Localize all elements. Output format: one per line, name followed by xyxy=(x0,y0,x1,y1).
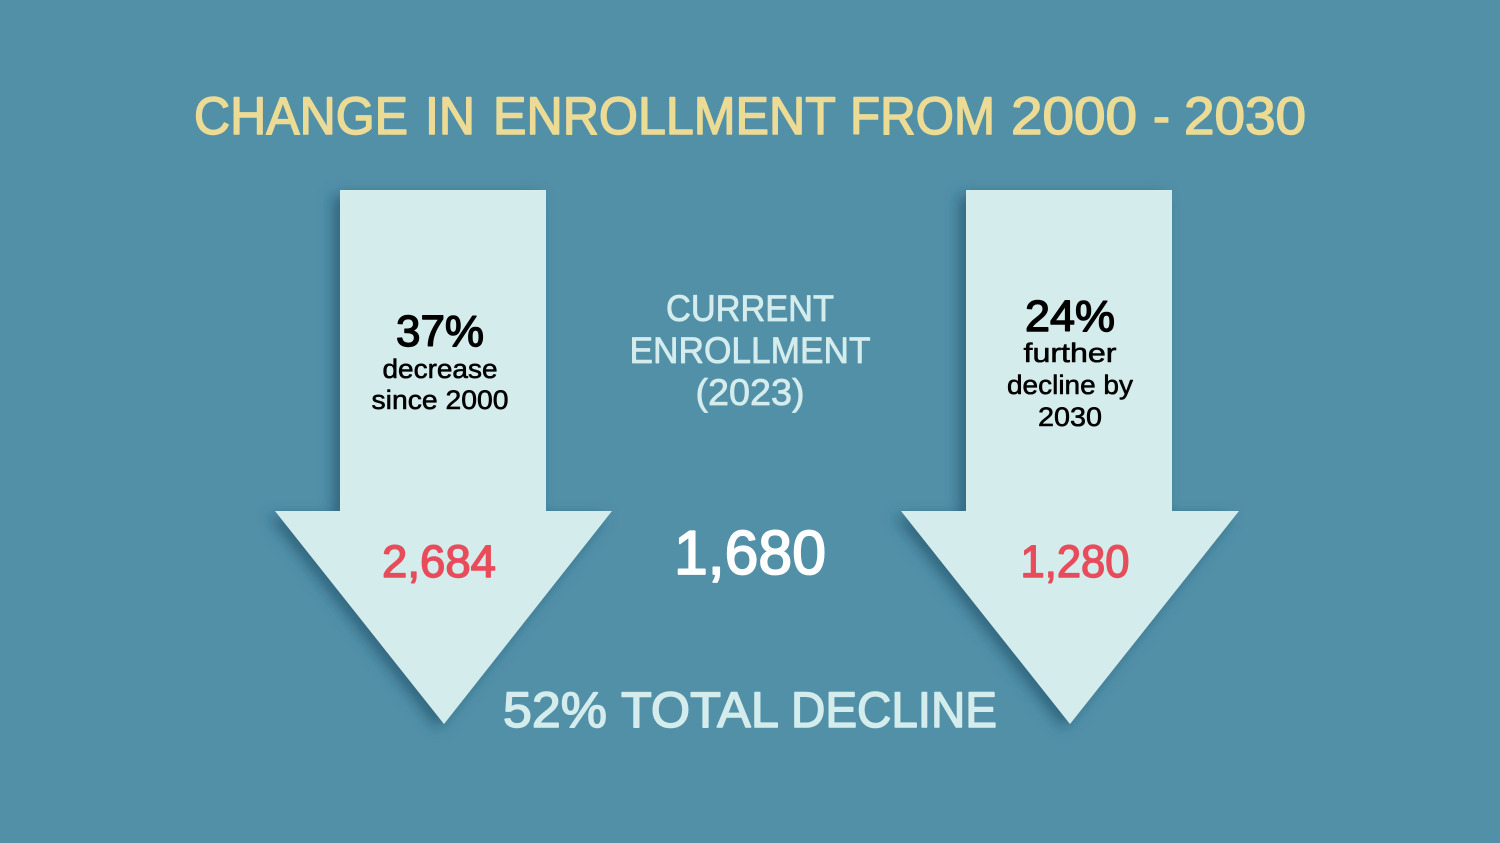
title: CHANGE xyxy=(194,87,408,146)
current enrollment value: 1,680 xyxy=(674,519,826,588)
arrow shape: right xyxy=(901,190,1239,724)
left arrow percentage: 37% xyxy=(396,307,484,356)
right arrow description xyxy=(1007,338,1134,432)
right arrow description: decline by xyxy=(1007,370,1134,400)
title: FROM xyxy=(850,87,995,146)
total decline callout: TOTAL xyxy=(621,682,778,738)
arrow shape: left xyxy=(275,190,612,724)
total decline callout: DECLINE xyxy=(791,682,997,738)
right arrow description: 2030 xyxy=(1038,402,1102,432)
left arrow description xyxy=(372,354,508,415)
current enrollment label xyxy=(630,288,870,413)
panel: left arrow, decrease since 2000 xyxy=(275,190,612,724)
left arrow description: decrease xyxy=(382,354,498,384)
current enrollment label: CURRENT xyxy=(666,288,834,329)
left arrow value: 2,684 xyxy=(382,536,496,587)
total decline callout: 52% xyxy=(503,682,607,738)
title: IN xyxy=(425,87,475,146)
current enrollment label: ENROLLMENT xyxy=(630,330,870,371)
current enrollment label: (2023) xyxy=(696,372,804,413)
left arrow description: since 2000 xyxy=(372,385,508,415)
title: 2030 xyxy=(1184,87,1306,146)
title: ENROLLMENT xyxy=(493,87,836,146)
right arrow value: 1,280 xyxy=(1020,536,1130,587)
right arrow percentage: 24% xyxy=(1025,292,1115,341)
title: - xyxy=(1153,87,1170,146)
right arrow description: further xyxy=(1024,338,1116,368)
panel: right arrow, further decline by 2030 xyxy=(901,190,1239,724)
title: 2000 xyxy=(1011,87,1137,146)
